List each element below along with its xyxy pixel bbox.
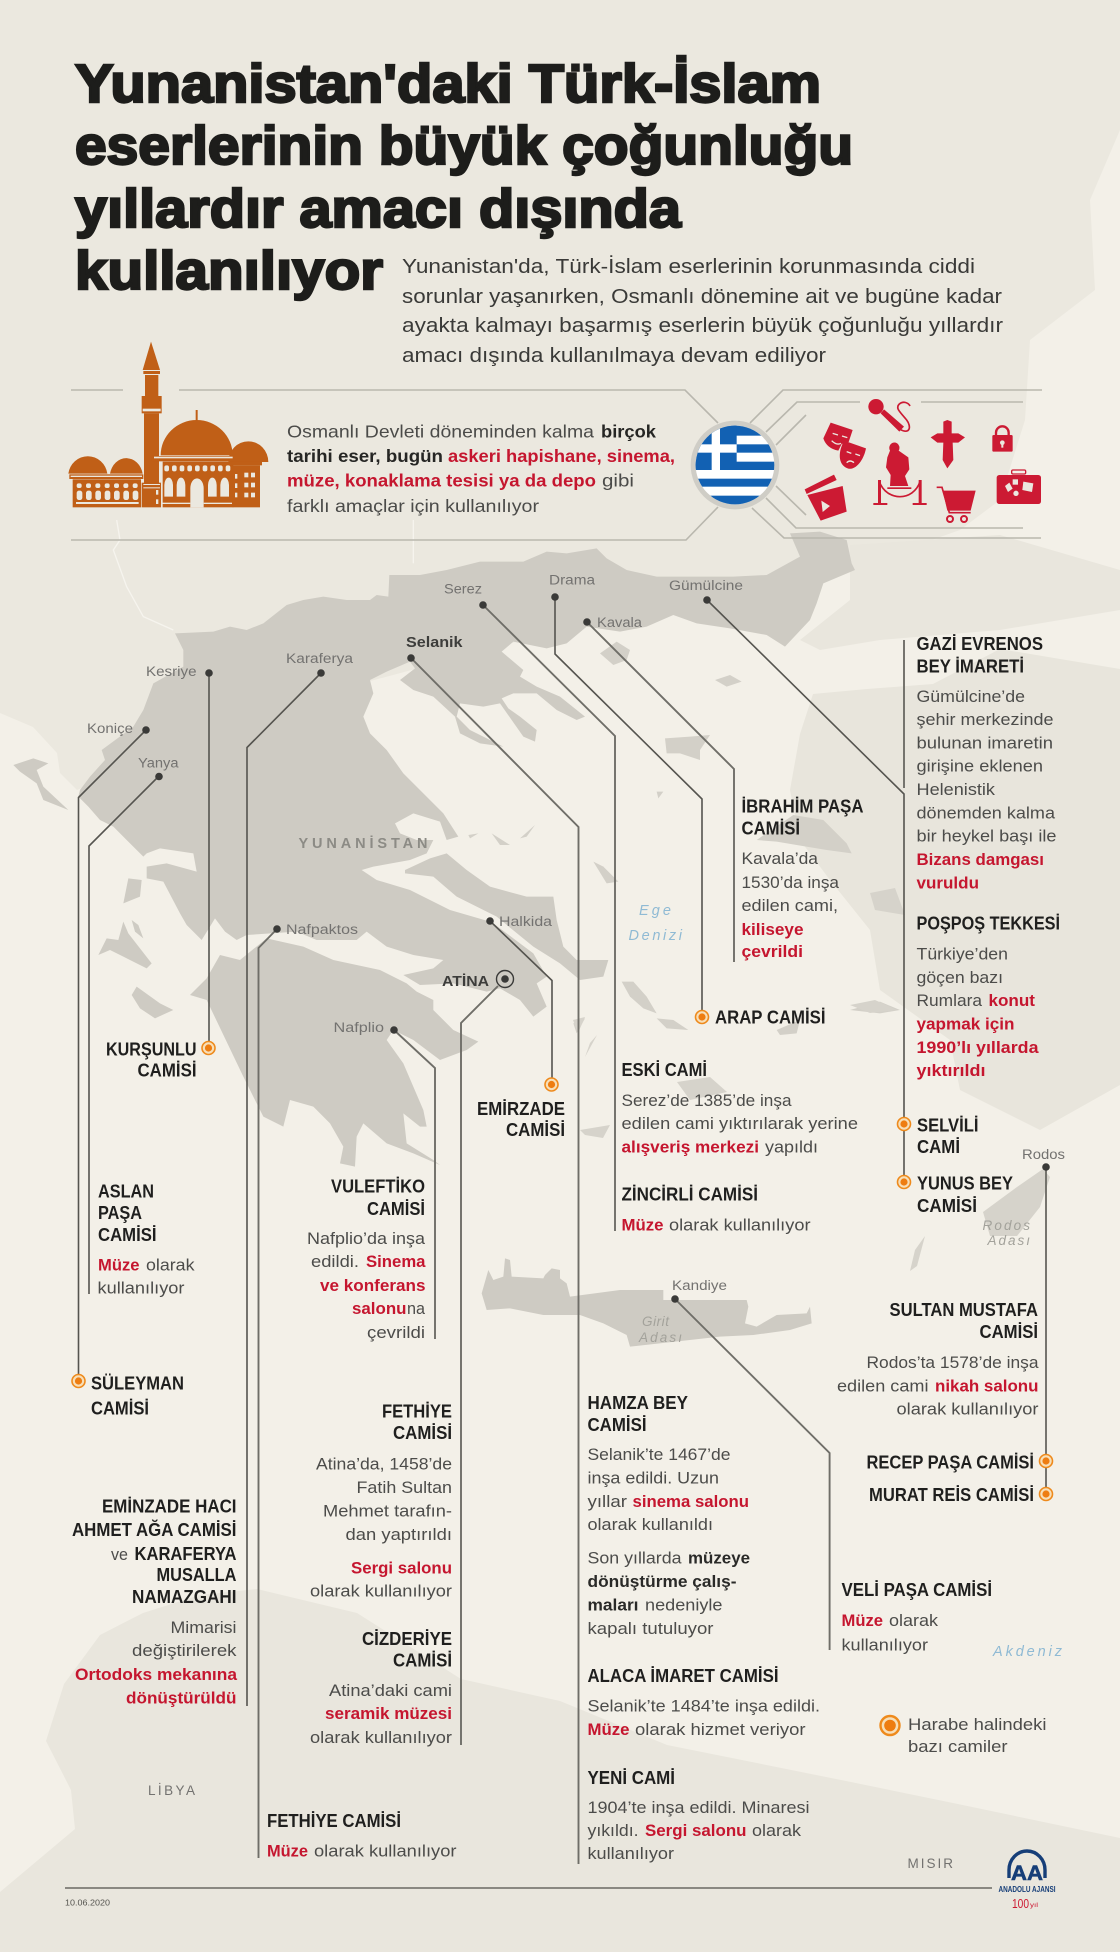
- block: Yeni Cami: olarak: [752, 1821, 802, 1840]
- logo: Anadolu Ajansı: ANADOLU AJANSI: [998, 1885, 1056, 1894]
- block: Yeni Cami: 1904’te inşa edildi. Minaresi: [588, 1798, 810, 1817]
- block: Gazi Evrenos Bey İmareti: BEY İMARETİ: [916, 656, 1024, 676]
- block: Fethiye Camisi, Atina: CAMİSİ: [393, 1423, 452, 1443]
- title: [75, 54, 853, 301]
- block: Gazi Evrenos Bey İmareti: vuruldu: [916, 874, 979, 892]
- block: İbrahim Paşa Camisi: Kavala’da: [742, 849, 819, 868]
- block: Yeni Cami: YENİ CAMİ: [588, 1768, 675, 1788]
- intro text: [402, 255, 1003, 367]
- map region labels: Akdeniz: [992, 1644, 1063, 1660]
- label: Kurşunlu Camisi: CAMİSİ: [138, 1060, 196, 1080]
- block: Hamza Bey Camisi: CAMİSİ: [588, 1415, 646, 1435]
- label: Emirzade Camisi: EMİRZADE: [477, 1099, 565, 1119]
- text: summary: gibi: [602, 470, 634, 490]
- title: yıllardır amacı dışında: [75, 179, 682, 239]
- block: Gazi Evrenos Bey İmareti: girişine eklenen: [916, 756, 1043, 776]
- map region labels: Adası: [986, 1233, 1030, 1248]
- block: Fethiye Camisi, Nafpaktos: FETHİYE CAMİSİ: [267, 1811, 401, 1831]
- block: Gazi Evrenos Bey İmareti: bir heykel başı ile: [916, 826, 1056, 846]
- logo: Anadolu Ajansı: [998, 1851, 1056, 1911]
- Crete: [482, 1258, 812, 1347]
- header frame lines: [71, 390, 1042, 540]
- map region labels: Girit: [642, 1314, 670, 1329]
- block: Hamza Bey Camisi: Son yıllarda: [588, 1548, 682, 1568]
- city markers: Drama: [549, 572, 596, 588]
- block: Eski Cami: alışveriş merkezi: [622, 1138, 759, 1156]
- map region labels: MISIR: [908, 1856, 953, 1871]
- block: Poşpoş Tekkesi: yıktırıldı: [916, 1061, 986, 1080]
- block: Cizderiye Camisi: seramik müzesi: [325, 1704, 452, 1723]
- block: Fethiye Camisi, Atina: olarak kullanılıyor: [310, 1582, 452, 1600]
- block: Veli Paşa Camisi: [842, 1580, 992, 1654]
- block: Eski Cami: [622, 1060, 858, 1156]
- block: Aslan Paşa Camisi: CAMİSİ: [98, 1225, 156, 1245]
- block: Hamza Bey Camisi: müzeye: [688, 1548, 750, 1568]
- block: Vuleftiko Camisi: CAMİSİ: [367, 1199, 425, 1219]
- block: Zincirli Camisi: [622, 1184, 811, 1234]
- mainland: [78, 532, 855, 1017]
- icons: usage types: [805, 399, 1041, 522]
- block: Yeni Cami: kullanılıyor: [588, 1844, 674, 1863]
- block: Eminzade Hacı Ahmet Ağa Camisi: Ortodoks mekanına: [75, 1665, 238, 1684]
- block: Vuleftiko Camisi: çevrildi: [367, 1323, 425, 1342]
- block: Poşpoş Tekkesi: Rumlara: [916, 991, 983, 1010]
- block: Fethiye Camisi, Atina: [310, 1402, 452, 1600]
- block: Fethiye Camisi, Atina: Fatih Sultan: [356, 1478, 452, 1497]
- Ionian islands: [13, 758, 68, 810]
- block: Eminzade Hacı Ahmet Ağa Camisi: değiştirilerek: [132, 1641, 237, 1660]
- block: İbrahim Paşa Camisi: çevrildi: [742, 942, 803, 961]
- block: Hamza Bey Camisi: olarak kullanıldı: [588, 1515, 713, 1534]
- block: Fethiye Camisi, Nafpaktos: Müze: [267, 1842, 308, 1860]
- label: Selvili Cami: [917, 1116, 978, 1157]
- block: Poşpoş Tekkesi: Türkiye’den: [916, 944, 1008, 964]
- block: Aslan Paşa Camisi: Müze: [98, 1256, 140, 1274]
- block: Sultan Mustafa Camisi: CAMİSİ: [980, 1322, 1038, 1342]
- block: Poşpoş Tekkesi: [916, 914, 1060, 1080]
- block: Hamza Bey Camisi: Selanik’te 1467’de: [588, 1445, 730, 1464]
- block: Cizderiye Camisi: CAMİSİ: [393, 1650, 452, 1670]
- Peloponnese: [190, 938, 478, 1167]
- label: Yunus Bey Camisi: YUNUS BEY: [917, 1174, 1013, 1194]
- city markers: ATİNA: [442, 973, 490, 990]
- block: Gazi Evrenos Bey İmareti: Helenistik: [916, 780, 996, 799]
- city markers: Selanik: [406, 635, 464, 651]
- map region labels: Adası: [638, 1330, 682, 1345]
- block: Fethiye Camisi, Nafpaktos: [267, 1811, 457, 1860]
- icon: clapperboard: [805, 475, 847, 521]
- block: İbrahim Paşa Camisi: edilen cami,: [742, 896, 838, 915]
- label: Emirzade Camisi: [477, 1099, 565, 1140]
- block: Sultan Mustafa Camisi: Rodos’ta 1578’de inşa: [866, 1353, 1039, 1372]
- legend: [880, 1715, 1046, 1756]
- title: kullanılıyor: [75, 241, 383, 301]
- label: Kurşunlu Camisi: KURŞUNLU: [106, 1040, 196, 1060]
- block: Eski Cami: ESKİ CAMİ: [622, 1060, 707, 1080]
- leader lines: [78, 597, 1046, 1864]
- block: Fethiye Camisi, Atina: dan yaptırıldı: [346, 1525, 452, 1544]
- city markers: Nafpaktos: [286, 922, 358, 937]
- block: Vuleftiko Camisi: salonu: [352, 1299, 406, 1318]
- text: summary: Osmanlı Devleti döneminden kalma: [287, 422, 594, 442]
- block: Aslan Paşa Camisi: [98, 1182, 195, 1298]
- label: Yunus Bey Camisi: [917, 1174, 1013, 1216]
- block: Yeni Cami: [588, 1768, 810, 1863]
- block: Poşpoş Tekkesi: göçen bazı: [916, 968, 1003, 987]
- icon: mosque: [68, 342, 268, 507]
- label: Kurşunlu Camisi: [106, 1040, 196, 1080]
- label: Yunus Bey Camisi: CAMİSİ: [917, 1196, 977, 1216]
- city markers: Halkida: [499, 914, 553, 929]
- block: Veli Paşa Camisi: Müze: [842, 1611, 883, 1630]
- block: Hamza Bey Camisi: dönüştürme çalış-: [588, 1572, 736, 1591]
- block: Cizderiye Camisi: Atina’daki cami: [329, 1681, 452, 1700]
- text: summary: birçok: [601, 422, 656, 442]
- block: Sultan Mustafa Camisi: olarak kullanılıyor: [896, 1400, 1039, 1418]
- block: İbrahim Paşa Camisi: [742, 796, 864, 961]
- block: Alaca İmaret Camisi: Selanik’te 1484’te inşa edildi.: [588, 1696, 820, 1716]
- intro text: ayakta kalmayı başarmış eserlerin büyük çoğunluğu yıllardır: [402, 315, 1003, 337]
- block: Eski Cami: yapıldı: [765, 1138, 818, 1156]
- block: Poşpoş Tekkesi: POŞPOŞ TEKKESİ: [916, 914, 1060, 934]
- intro text: amacı dışında kullanılmaya devam ediliyor: [402, 345, 826, 367]
- block: Hamza Bey Camisi: maları: [588, 1596, 638, 1614]
- block: Alaca İmaret Camisi: [588, 1666, 820, 1739]
- block: Gazi Evrenos Bey İmareti: [916, 634, 1056, 892]
- block: Fethiye Camisi, Atina: FETHİYE: [382, 1402, 452, 1422]
- block: Veli Paşa Camisi: kullanılıyor: [842, 1636, 928, 1654]
- block: Veli Paşa Camisi: olarak: [889, 1611, 939, 1630]
- title: Yunanistan'daki Türk-İslam: [75, 54, 821, 114]
- icon: suitcase: [997, 470, 1041, 504]
- block: Eminzade Hacı Ahmet Ağa Camisi: dönüştürüldü: [126, 1688, 236, 1708]
- block: Hamza Bey Camisi: kapalı tutuluyor: [588, 1619, 714, 1638]
- block: Poşpoş Tekkesi: konut: [988, 991, 1035, 1010]
- block: Alaca İmaret Camisi: Müze: [588, 1720, 630, 1739]
- block: Aslan Paşa Camisi: PAŞA: [98, 1203, 142, 1223]
- block: Fethiye Camisi, Atina: Mehmet tarafın-: [323, 1502, 452, 1520]
- icon: lock: [992, 426, 1013, 452]
- block: Sultan Mustafa Camisi: [837, 1300, 1039, 1418]
- city markers: Kandiye: [672, 1278, 727, 1293]
- block: Fethiye Camisi, Atina: Atina’da, 1458’de: [316, 1454, 452, 1474]
- Aegean islands: [600, 642, 630, 665]
- label: Recep Paşa Camisi: RECEP PAŞA CAMİSİ: [866, 1452, 1034, 1472]
- block: Gazi Evrenos Bey İmareti: bulunan imaretin: [916, 734, 1053, 752]
- block: Eminzade Hacı Ahmet Ağa Camisi: NAMAZGAHI: [132, 1587, 236, 1607]
- text: summary: farklı amaçlar için kullanılıyor: [287, 496, 539, 516]
- block: Gazi Evrenos Bey İmareti: GAZİ EVRENOS: [916, 634, 1043, 654]
- block: Poşpoş Tekkesi: 1990’lı yıllarda: [916, 1038, 1039, 1057]
- Euboea: [405, 853, 608, 980]
- footer rule and date: 10.06.2020: [65, 1898, 110, 1908]
- city markers: [87, 572, 1065, 1303]
- text: summary: tarihi eser, bugün: [287, 446, 443, 466]
- text: summary: müze, konaklama tesisi ya da depo: [287, 470, 596, 490]
- block: Eminzade Hacı Ahmet Ağa Camisi: KARAFERYA: [134, 1544, 236, 1564]
- legend: Harabe halindeki: [908, 1715, 1046, 1734]
- icon: Greek flag: [691, 421, 779, 509]
- block: Cizderiye Camisi: [310, 1629, 452, 1747]
- block: Eminzade Hacı Ahmet Ağa Camisi: [72, 1496, 238, 1708]
- block: Yeni Cami: yıkıldı.: [588, 1821, 638, 1840]
- block: Vuleftiko Camisi: [307, 1176, 426, 1342]
- label: Süleyman Camisi: [91, 1374, 184, 1418]
- block: Gazi Evrenos Bey İmareti: dönemden kalma: [916, 804, 1056, 822]
- city markers: Kesriye: [146, 664, 196, 679]
- block: Gazi Evrenos Bey İmareti: şehir merkezinde: [916, 710, 1054, 729]
- block: Vuleftiko Camisi: Sinema: [366, 1252, 426, 1271]
- block: Hamza Bey Camisi: sinema salonu: [632, 1492, 749, 1511]
- label: Selvili Cami: CAMİ: [917, 1137, 960, 1157]
- logo: Anadolu Ajansı: AA: [1011, 1862, 1043, 1885]
- label: Emirzade Camisi: CAMİSİ: [506, 1120, 565, 1140]
- block: Sultan Mustafa Camisi: edilen cami: [837, 1376, 928, 1396]
- block: Hamza Bey Camisi: nedeniyle: [645, 1596, 722, 1614]
- label: Arap Camisi: ARAP CAMİSİ: [715, 1008, 826, 1028]
- map region labels: Ege: [639, 903, 671, 919]
- block: Vuleftiko Camisi: edildi.: [311, 1252, 359, 1271]
- block: Yeni Cami: Sergi salonu: [645, 1821, 746, 1840]
- text: summary: [287, 422, 675, 516]
- block: Eminzade Hacı Ahmet Ağa Camisi: ve: [111, 1545, 128, 1564]
- block: Hamza Bey Camisi: [588, 1393, 750, 1638]
- block: Sultan Mustafa Camisi: nikah salonu: [935, 1376, 1038, 1396]
- city markers: Nafplio: [334, 1020, 384, 1035]
- city markers: Karaferya: [286, 651, 354, 666]
- block: Alaca İmaret Camisi: olarak hizmet veriyor: [635, 1720, 806, 1739]
- map region labels: LİBYA: [148, 1783, 195, 1798]
- block: Sultan Mustafa Camisi: SULTAN MUSTAFA: [890, 1300, 1038, 1320]
- city markers: Koniçe: [87, 721, 133, 736]
- block: Gazi Evrenos Bey İmareti: Gümülcine’de: [916, 687, 1025, 706]
- block: Alaca İmaret Camisi: ALACA İMARET CAMİSİ: [588, 1666, 778, 1686]
- icon: museum statue: [873, 443, 927, 505]
- block: İbrahim Paşa Camisi: 1530’da inşa: [742, 873, 840, 892]
- label: Murat Reis Camisi: MURAT REİS CAMİSİ: [869, 1485, 1034, 1505]
- block: Hamza Bey Camisi: HAMZA BEY: [588, 1393, 688, 1413]
- block: İbrahim Paşa Camisi: İBRAHİM PAŞA: [742, 796, 864, 816]
- block: Aslan Paşa Camisi: olarak: [146, 1256, 195, 1274]
- city markers: Serez: [444, 582, 482, 596]
- block: Gazi Evrenos Bey İmareti: Bizans damgası: [916, 850, 1044, 869]
- block: Poşpoş Tekkesi: yapmak için: [916, 1014, 1014, 1034]
- block: Hamza Bey Camisi: yıllar: [588, 1492, 627, 1511]
- block: Aslan Paşa Camisi: ASLAN: [98, 1182, 154, 1202]
- map region labels: YUNANİSTAN: [298, 835, 428, 852]
- text: summary: askeri hapishane, sinema,: [448, 446, 675, 466]
- block: Zincirli Camisi: olarak kullanılıyor: [669, 1216, 811, 1234]
- city markers: Gümülcine: [669, 578, 743, 593]
- title: eserlerinin büyük çoğunluğu: [75, 116, 853, 176]
- block: Vuleftiko Camisi: VULEFTİKO: [331, 1176, 425, 1196]
- label: Süleyman Camisi: CAMİSİ: [91, 1398, 149, 1418]
- block: Cizderiye Camisi: olarak kullanılıyor: [310, 1728, 452, 1747]
- logo: Anadolu Ajansı: 100: [1012, 1896, 1029, 1911]
- block: Zincirli Camisi: ZİNCİRLİ CAMİSİ: [622, 1184, 758, 1204]
- block: Vuleftiko Camisi: ve konferans: [320, 1276, 426, 1295]
- block: Eminzade Hacı Ahmet Ağa Camisi: AHMET AĞA CAMİSİ: [72, 1519, 236, 1540]
- block: Eminzade Hacı Ahmet Ağa Camisi: MUSALLA: [156, 1565, 236, 1585]
- map region labels: [148, 835, 1063, 1871]
- legend: bazı camiler: [908, 1737, 1008, 1756]
- block: Eski Cami: Serez’de 1385’de inşa: [622, 1091, 792, 1110]
- label: Süleyman Camisi: SÜLEYMAN: [91, 1374, 184, 1394]
- map: Greece: [13, 532, 1050, 1347]
- block: Eski Cami: edilen cami yıktırılarak yerine: [622, 1114, 858, 1133]
- intro text: Yunanistan'da, Türk-İslam eserlerinin korunmasında ciddi: [402, 255, 975, 278]
- intro text: sorunlar yaşanırken, Osmanlı dönemine ait ve bugüne kadar: [402, 286, 1002, 308]
- icon: cross: [931, 420, 965, 468]
- block: Veli Paşa Camisi: VELİ PAŞA CAMİSİ: [842, 1580, 992, 1600]
- ruin markers: [72, 1010, 1052, 1500]
- city markers: Kavala: [597, 615, 643, 630]
- block: İbrahim Paşa Camisi: kiliseye: [742, 920, 804, 939]
- logo: Anadolu Ajansı: yıl: [1030, 1903, 1038, 1909]
- block: Eminzade Hacı Ahmet Ağa Camisi: Mimarisi: [170, 1618, 236, 1637]
- map region labels: Rodos: [982, 1218, 1030, 1233]
- block: İbrahim Paşa Camisi: CAMİSİ: [742, 818, 800, 838]
- label: Selvili Cami: SELVİLİ: [917, 1116, 978, 1136]
- block: Zincirli Camisi: Müze: [622, 1216, 664, 1234]
- block: Vuleftiko Camisi: Nafplio’da inşa: [307, 1229, 426, 1248]
- block: Cizderiye Camisi: CİZDERİYE: [362, 1629, 452, 1649]
- city markers: Rodos: [1022, 1147, 1065, 1162]
- city markers: Yanya: [138, 756, 179, 770]
- icon: shopping cart: [937, 487, 976, 522]
- icon: microphone: [868, 399, 910, 432]
- block: Aslan Paşa Camisi: kullanılıyor: [98, 1278, 185, 1298]
- block: Eminzade Hacı Ahmet Ağa Camisi: EMİNZADE HACI: [102, 1496, 236, 1516]
- block: Vuleftiko Camisi: na: [407, 1299, 426, 1318]
- icon: theatre masks: [823, 423, 866, 469]
- block: Hamza Bey Camisi: inşa edildi. Uzun: [588, 1468, 719, 1488]
- block: Fethiye Camisi, Atina: Sergi salonu: [351, 1558, 452, 1578]
- block: Fethiye Camisi, Nafpaktos: olarak kullanılıyor: [314, 1842, 457, 1860]
- map region labels: Denizi: [628, 928, 683, 944]
